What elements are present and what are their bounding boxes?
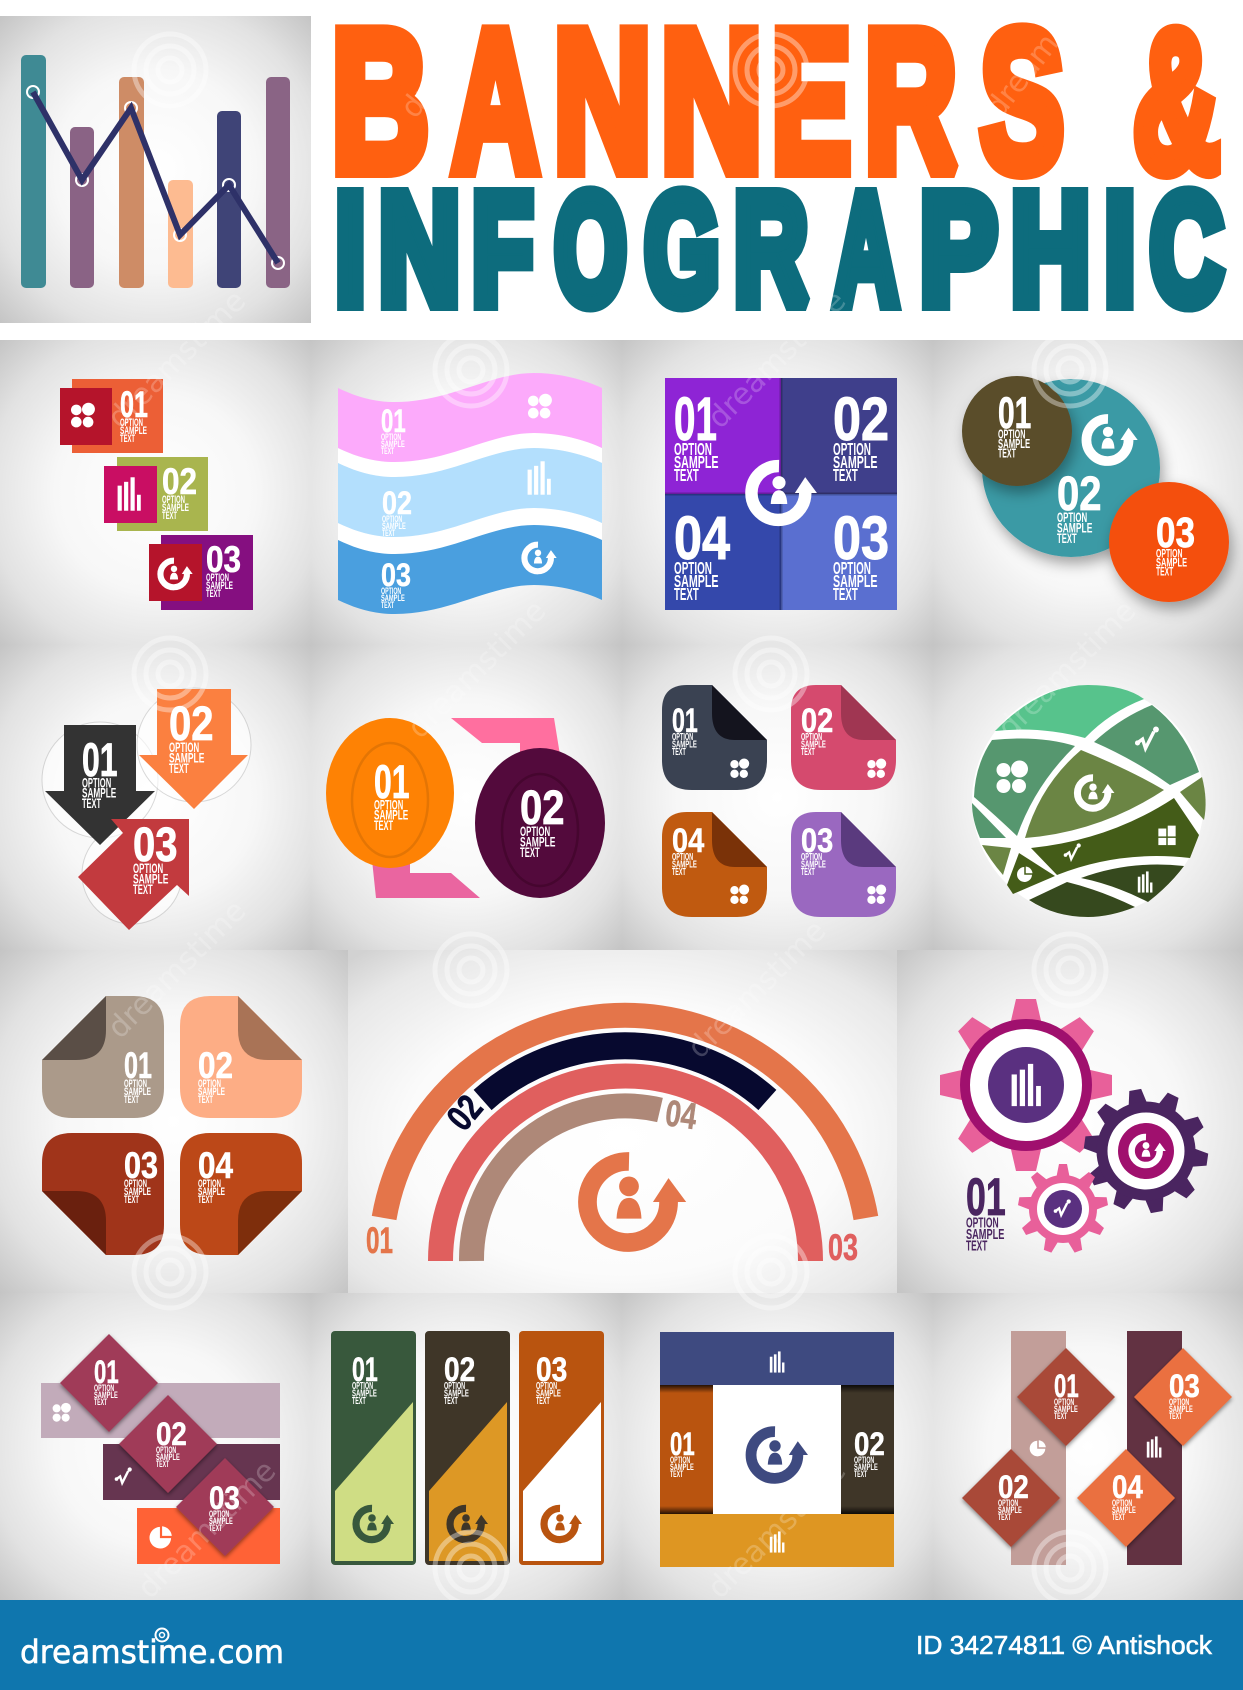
label 01 [124,1045,152,1106]
label 02 [801,702,833,758]
label 01: OPTION [381,432,401,442]
label 02 [998,1469,1029,1522]
watermarks: dream [394,27,481,125]
label 03: OPTION [801,852,822,863]
label 03 [124,1145,158,1206]
icon: bars [1147,1436,1161,1458]
label 02 [854,1426,885,1479]
label 01: OPTION [352,1381,373,1392]
icon: refresh [751,1432,808,1478]
watermarks: dreamstime [101,893,253,1046]
label 03 [536,1351,567,1407]
label 01: OPTION [670,1455,690,1465]
label 03: OPTION [536,1381,557,1392]
label 01: 01 [374,755,410,808]
label 01: TEXT [352,1396,366,1407]
label 01 [674,385,719,485]
label 04 [198,1145,233,1206]
label 01: TEXT [672,747,686,758]
label 01 [82,733,118,811]
label 03: SAMPLE [801,860,826,871]
label 01: OPTION [966,1215,999,1232]
watermarks: dreamstime [991,593,1143,746]
label 02: 02 [382,485,412,521]
label 03: OPTION [133,860,163,876]
label 01: 01 [352,1351,378,1389]
label 01: TEXT [94,1397,107,1407]
panel: overlapping circles [962,376,1229,602]
icon: dots [996,760,1028,793]
label 01: SAMPLE [674,452,719,472]
label 04 [674,504,730,604]
icon: refresh [450,1508,488,1540]
label 01 [374,755,410,833]
watermarks: dreamstime [701,1453,853,1606]
label 03 [1156,509,1195,579]
label 02: SAMPLE [169,749,204,765]
label 03: SAMPLE [381,593,405,603]
label 04 [1112,1469,1143,1522]
label 04: OPTION [1112,1498,1132,1508]
icon: refresh [1086,419,1138,461]
title: INFOGRAPHIC: A [834,162,898,337]
label 03: TEXT [206,588,221,600]
label 01: 01 [674,385,717,453]
label 02: SAMPLE [801,740,826,751]
label 01: TEXT [998,447,1016,461]
label 02: OPTION [382,514,402,524]
label 01 [966,1168,1006,1254]
panel backgrounds grid [0,340,1243,1600]
label 01: 01 [998,389,1031,438]
panel: wave banners [338,373,602,614]
label 01: OPTION [674,439,712,459]
label 01: 01 [366,1220,393,1261]
label 02: SAMPLE [382,521,406,531]
label 01: SAMPLE [374,808,408,823]
label 02 [162,461,197,522]
label 03: TEXT [1156,565,1174,579]
label 01: SAMPLE [120,425,147,437]
label 01: TEXT [670,1469,683,1479]
icon: pie [149,1526,172,1549]
label 02 [833,385,889,485]
watermarks: dreamstime [131,1453,283,1606]
title: INFOGRAPHIC: P [920,162,997,337]
icon: trend [1064,843,1081,859]
label 04: 04 [674,504,730,572]
label 02: OPTION [854,1455,874,1465]
panel: concentric arcs [366,1015,866,1268]
label 01: SAMPLE [124,1086,151,1098]
label 01: TEXT [82,796,101,811]
label 01: 01 [120,384,148,425]
label 02: TEXT [444,1396,458,1407]
icon: trend [1135,727,1159,748]
label 02 [382,485,412,538]
label 02: OPTION [801,732,822,743]
icon: refresh [751,466,817,520]
label 01: TEXT [674,465,699,485]
label 03 [206,539,241,600]
icon: dots [53,1403,71,1422]
label 01: OPTION [120,417,143,429]
label 03: OPTION [206,572,229,584]
label 02: SAMPLE [162,502,189,514]
label 01: SAMPLE [966,1226,1004,1243]
panel: header bar chart [0,16,311,323]
label 02: 02 [801,702,833,740]
label 02: TEXT [1057,530,1077,546]
panel: arrows [42,688,251,930]
label 03 [209,1480,240,1533]
label 01: 01 [124,1045,152,1086]
label 02 [198,1045,233,1106]
label 01: SAMPLE [1054,1404,1078,1414]
label 02: OPTION [833,439,871,459]
label 02: SAMPLE [444,1389,469,1400]
label 03: TEXT [381,600,394,610]
label 04: TEXT [672,867,686,878]
label 03: SAMPLE [133,870,168,886]
label 01: 01 [966,1168,1006,1227]
label 04 [672,822,704,878]
label 02 [520,781,565,860]
icon: bars [770,1531,784,1553]
label 02: OPTION [998,1498,1018,1508]
label 03: 03 [209,1480,240,1516]
label 03 [801,822,833,878]
watermarks: dream [979,27,1066,125]
icon: refresh [524,545,557,571]
label 03: OPTION [1156,546,1182,560]
label 03 [833,504,889,604]
label 04: 04 [672,822,704,860]
panel: four colour square [665,378,897,610]
label 01: OPTION [998,428,1025,442]
medium gear [1083,1088,1209,1214]
icon: refresh [544,1508,582,1540]
panel: three vertical cards [331,1331,604,1565]
label 02: 02 [162,461,197,502]
panel: gears [940,999,1209,1254]
label 02 [156,1416,187,1469]
panel: segmented globe [972,685,1206,917]
label 02: SAMPLE [156,1452,180,1462]
label 03 [1169,1368,1200,1421]
label 03: OPTION [1169,1397,1189,1407]
label 01: OPTION [94,1383,114,1393]
big gear [940,999,1112,1171]
label 01: SAMPLE [381,439,405,449]
icon: dots [71,403,95,427]
label 04: TEXT [674,584,699,604]
label 01: TEXT [966,1237,988,1254]
label 01: SAMPLE [352,1389,377,1400]
label 04: 04 [663,1092,700,1137]
label 04: OPTION [198,1178,221,1190]
label 04: 04 [1112,1469,1143,1505]
panel: frame square [660,1332,894,1567]
label 03: OPTION [209,1509,229,1519]
label 02: 02 [169,697,214,751]
label 02: SAMPLE [520,833,555,849]
label 01: OPTION [124,1078,147,1090]
label 02 [169,697,214,776]
label 03: 03 [833,504,889,572]
label 03: TEXT [133,881,153,897]
watermarks [101,27,1143,1606]
label 03: TEXT [209,1523,222,1533]
label 02: OPTION [1057,509,1087,525]
icon: trend [115,1467,132,1483]
icon: refresh [356,1508,394,1540]
label 03: TEXT [124,1194,139,1206]
label 01 [672,702,698,758]
label 02: TEXT [198,1094,213,1106]
label 03: 03 [1169,1368,1200,1404]
label 03 [381,557,411,610]
panel: four folded petals [42,996,302,1255]
label 03: 03 [828,1227,858,1268]
label 03: SAMPLE [536,1389,561,1400]
label 03: SAMPLE [209,1516,233,1526]
label 04: TEXT [1112,1512,1125,1522]
label 03: OPTION [833,558,871,578]
label 03: 03 [1156,509,1195,557]
icon: dots [730,884,749,904]
label 02: 02 [439,1087,491,1138]
label 02: SAMPLE [998,1505,1022,1515]
icon: dots [867,758,886,778]
label 01: SAMPLE [670,1462,694,1472]
label 02 [444,1351,475,1407]
icon: dots [867,884,886,904]
label 01 [120,384,148,445]
panel: folded notes [662,685,896,917]
label 04: SAMPLE [198,1186,225,1198]
icon: pie [1030,1440,1046,1456]
label 01: SAMPLE [998,437,1030,451]
label 02: 02 [833,385,889,453]
label 02: TEXT [854,1469,867,1479]
label 01: SAMPLE [94,1390,118,1400]
label 02: 02 [444,1351,475,1389]
label 02: OPTION [444,1381,465,1392]
panel: vertical bars with diamonds [962,1331,1232,1565]
label 02: TEXT [801,747,815,758]
label 03: OPTION [381,586,401,596]
label 02: TEXT [156,1459,169,1469]
label 02: OPTION [162,494,185,506]
footer bar [0,1600,1243,1690]
watermarks: dreamstime [401,593,553,746]
footer logo: dreamstime.com [20,1633,284,1671]
label 03: OPTION [124,1178,147,1190]
label 01: 01 [672,702,698,740]
label 02: 02 [1057,467,1102,521]
label 03: 03 [133,818,178,872]
label 01: SAMPLE [82,786,116,801]
label 01: 01 [670,1426,695,1462]
panel: ellipses with ribbon [326,718,605,898]
label 02: TEXT [162,510,177,522]
label 01: OPTION [82,775,111,790]
label 01: 01 [82,733,118,786]
label 03: TEXT [833,584,858,604]
label 01: 01 [381,403,406,439]
label 02: TEXT [998,1512,1011,1522]
label 03: TEXT [536,1396,550,1407]
title: INFOGRAPHIC: H [1011,162,1090,337]
label 03: 03 [381,557,411,593]
watermarks: dreamstime [701,283,853,436]
title: INFOGRAPHIC: F [472,162,533,337]
label 01: OPTION [672,732,693,743]
icon: refresh [160,561,193,587]
label 01: SAMPLE [672,740,697,751]
label 03: 03 [536,1351,567,1389]
icon: squares [1158,826,1176,845]
panel: stepped squares [60,379,253,610]
label 02: 02 [520,781,565,835]
label 03: 03 [124,1145,158,1186]
label 01: TEXT [120,433,135,445]
icon: pie [1017,866,1032,882]
title: INFOGRAPHIC [335,162,1223,337]
label 02: 02 [854,1426,885,1462]
icon: bars [1138,871,1152,893]
small gear [1017,1164,1109,1254]
label 04: OPTION [674,558,712,578]
label 03: 03 [801,822,833,860]
label 01: TEXT [381,446,394,456]
icon: bars [528,461,551,495]
label 02: TEXT [833,465,858,485]
label 03: SAMPLE [206,580,233,592]
label 03: TEXT [801,867,815,878]
label 01: 01 [1054,1368,1079,1404]
label 01: OPTION [374,797,403,812]
label 01 [1054,1368,1079,1421]
label 01: OPTION [1054,1397,1074,1407]
label 01 [670,1426,695,1479]
label 03: SAMPLE [1156,555,1187,569]
label 04: SAMPLE [674,571,719,591]
label 03: TEXT [1169,1411,1182,1421]
icon: bars [770,1351,784,1373]
label 04: SAMPLE [1112,1505,1136,1515]
label 02: TEXT [520,844,540,860]
label 01: TEXT [374,818,393,833]
panel: diamonds on bars [41,1334,280,1564]
icon: dots [730,758,749,778]
label 02: OPTION [520,823,550,839]
label 03: SAMPLE [1169,1404,1193,1414]
label 02: TEXT [382,528,395,538]
label 02: 02 [998,1469,1029,1505]
label 03 [133,818,178,897]
icon: bars [118,477,141,511]
label 02 [1057,467,1102,546]
label 02: SAMPLE [198,1086,225,1098]
watermarks: dreamstime [681,913,833,1066]
title: INFOGRAPHIC: I [1104,162,1135,337]
label 01: 01 [94,1354,119,1390]
icon: refresh [587,1161,686,1243]
icon: dots [528,394,552,418]
footer credit: ID 34274811 © Antishock [916,1630,1213,1660]
title: INFOGRAPHIC: I [335,162,365,337]
label 02: TEXT [169,760,189,776]
label 03: SAMPLE [124,1186,151,1198]
label 01 [381,403,406,456]
icon: refresh [1077,778,1114,808]
label 02: SAMPLE [833,452,878,472]
title: INFOGRAPHIC: O [554,162,626,337]
label 01 [998,389,1031,461]
label 04: OPTION [672,852,693,863]
label 02: 02 [156,1416,187,1452]
label 04: SAMPLE [672,860,697,871]
label 02: SAMPLE [854,1462,878,1472]
title: BANNERS & [332,0,1220,213]
label 02: 02 [198,1045,233,1086]
title: INFOGRAPHIC: G [644,162,720,337]
title: INFOGRAPHIC: R [734,162,808,337]
label 02: OPTION [169,739,199,755]
label 02: OPTION [198,1078,221,1090]
label 02: OPTION [156,1445,176,1455]
title: INFOGRAPHIC: N [379,162,460,337]
label 03: SAMPLE [833,571,878,591]
label 03: 03 [206,539,241,580]
label 01 [94,1354,119,1407]
label 01: TEXT [124,1094,139,1106]
label 04: TEXT [198,1194,213,1206]
label 01 [352,1351,378,1407]
label 01: TEXT [1054,1411,1067,1421]
watermarks: dreamstime [101,283,253,436]
label 04: 04 [198,1145,233,1186]
label 02: SAMPLE [1057,519,1092,535]
